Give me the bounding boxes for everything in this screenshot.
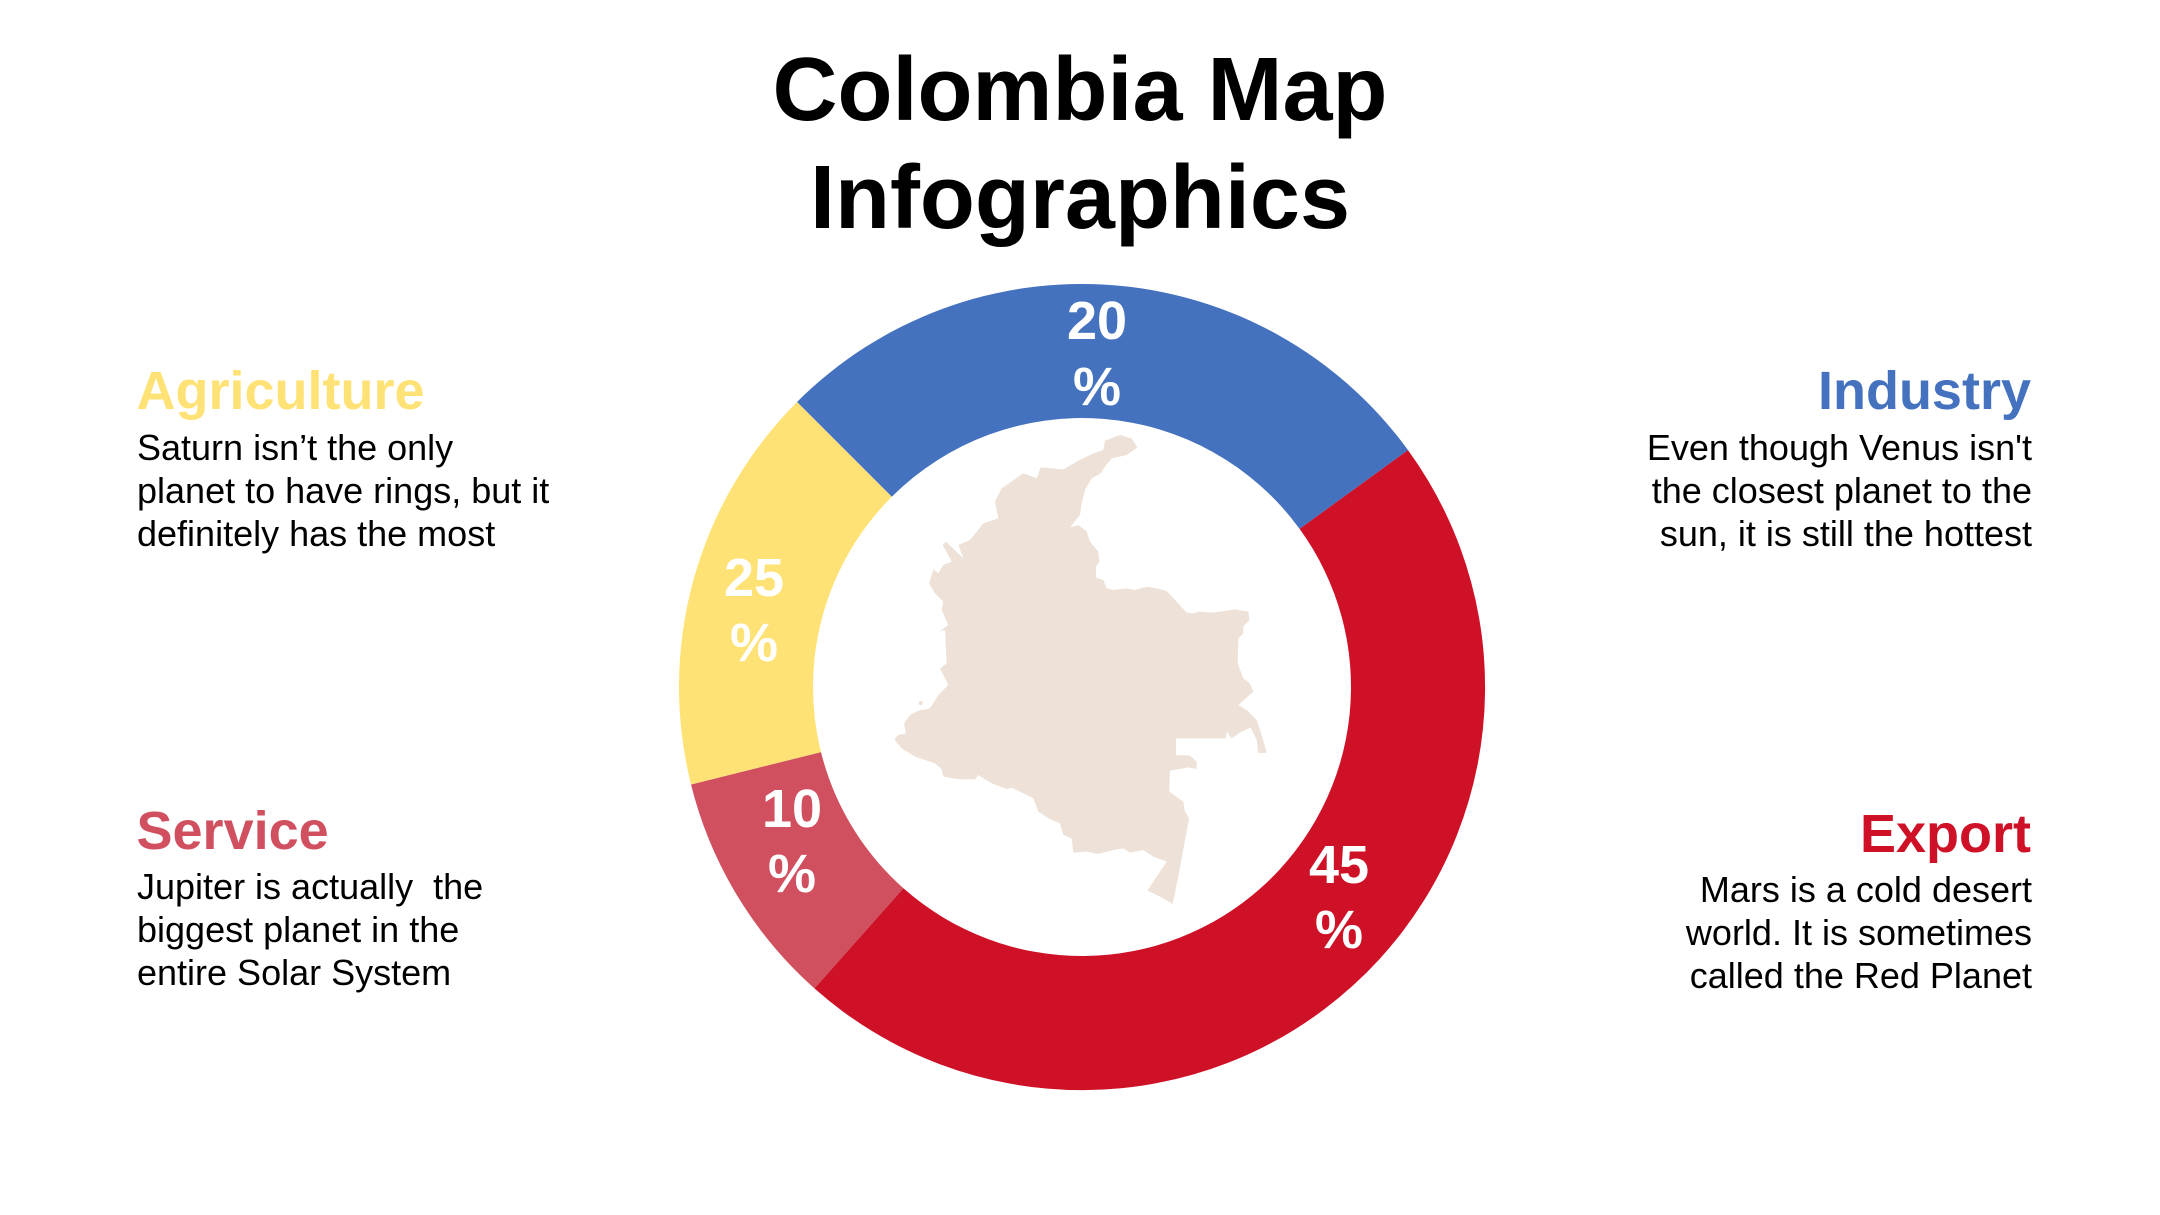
label: 20%: [1067, 291, 1127, 417]
panel: service: [136, 801, 483, 993]
label: 10%: %: [768, 844, 816, 904]
title: Infographics: [810, 148, 1350, 248]
label: 20%: %: [1073, 357, 1121, 417]
label: 25%: %: [730, 613, 778, 673]
text: export description: Mars is a cold desert: [1700, 869, 2032, 910]
text: industry description: Even though Venus isn't: [1647, 427, 2032, 468]
donut chart: [679, 284, 1485, 1090]
text: industry description: the closest planet to the: [1652, 470, 2032, 511]
slice: industry 20%: [797, 284, 1408, 529]
text: industry description: sun, it is still the hottest: [1660, 513, 2032, 554]
heading: service: Service: [136, 801, 329, 861]
text: export description: [1685, 869, 2032, 996]
text: export description: called the Red Planet: [1690, 955, 2032, 996]
label: 45%: [1309, 835, 1369, 960]
text: industry description: [1647, 427, 2032, 554]
heading: export: Export: [1860, 804, 2031, 864]
panel: agriculture: [136, 361, 549, 554]
title: Colombia Map: [772, 40, 1388, 140]
text: service description: biggest planet in the: [137, 909, 459, 950]
text: agriculture description: planet to have rings, but it: [137, 470, 549, 511]
slice: service 10%: [691, 752, 903, 988]
heading: industry: Industry: [1818, 361, 2031, 421]
text: service description: Jupiter is actually the: [137, 866, 483, 907]
map of Colombia: [894, 435, 1267, 904]
slice: agriculture 25%: [679, 402, 892, 784]
label: 10%: 10: [762, 779, 822, 839]
label: 10%: [762, 779, 822, 904]
text: agriculture description: Saturn isn’t the only: [137, 427, 453, 468]
label: 20%: 20: [1067, 291, 1127, 351]
text: agriculture description: definitely has the most: [137, 513, 495, 554]
panel: export: [1685, 804, 2032, 996]
text: service description: [137, 866, 483, 993]
text: agriculture description: [137, 427, 549, 554]
heading: agriculture: Agriculture: [136, 361, 425, 421]
text: service description: entire Solar System: [137, 952, 451, 993]
panel: industry: [1647, 361, 2032, 554]
label: 45%: %: [1315, 900, 1363, 960]
label: 25%: [724, 548, 784, 673]
text: export description: world. It is sometimes: [1685, 912, 2032, 953]
slice: export 45%: [814, 450, 1485, 1090]
label: 25%: 25: [724, 548, 784, 608]
label: 45%: 45: [1309, 835, 1369, 895]
title: [772, 40, 1388, 248]
